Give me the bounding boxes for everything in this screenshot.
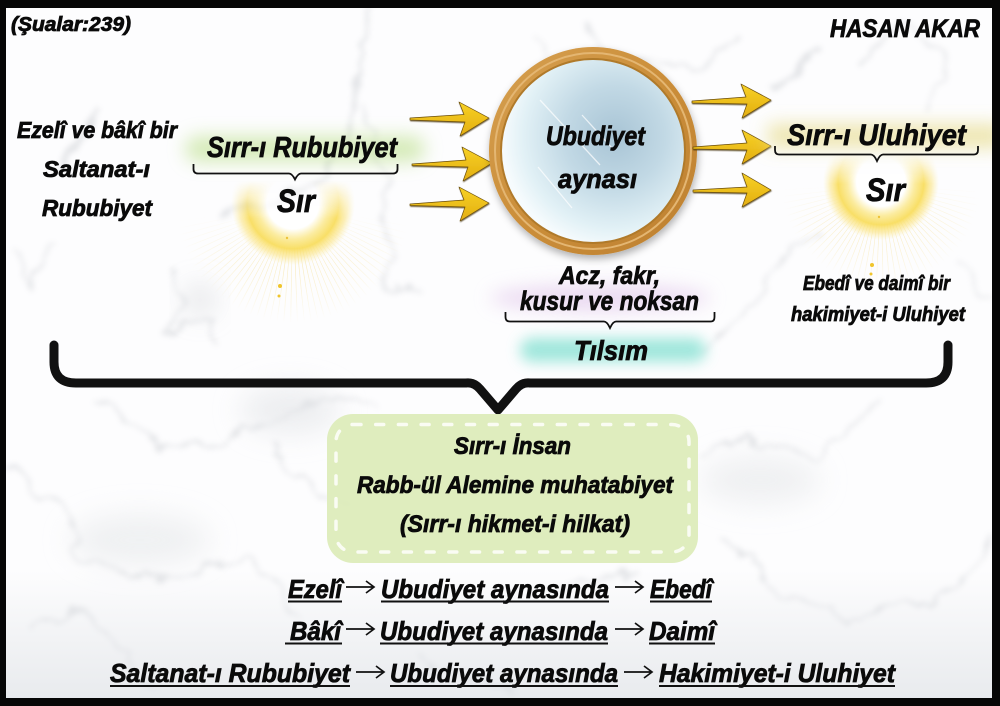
big brace	[54, 345, 948, 410]
brace	[194, 164, 398, 180]
author name: HASAN AKAR	[830, 15, 980, 43]
conclusion line 3: Saltanat-ı Rububiyet	[110, 658, 351, 688]
box text: Sırr-ı İnsan	[454, 433, 571, 460]
purple highlight	[490, 284, 710, 312]
right description: hakimiyet-i Uluhiyet	[791, 304, 966, 326]
left description	[17, 117, 178, 221]
light glow	[811, 115, 951, 276]
conclusion line 2: Bâkî	[290, 616, 344, 646]
stitched border	[336, 424, 689, 552]
conclusion line 1	[288, 574, 714, 604]
right description	[791, 273, 966, 326]
left description: Ezelî ve bâkî bir	[17, 117, 178, 143]
panel: Sırr-ı Rububiyet	[185, 125, 425, 298]
conclusion line 2	[285, 616, 718, 646]
left description: Rububiyet	[42, 195, 153, 221]
box	[327, 414, 698, 563]
heading: Sırr-ı Rububiyet	[207, 132, 398, 164]
brace	[506, 312, 714, 328]
label: Sır: Sır	[277, 183, 316, 219]
left description: Saltanat-ı	[43, 156, 150, 182]
conclusion line 3	[110, 658, 896, 688]
panel: Tılsım	[490, 262, 714, 366]
heading: Sırr-ı Uluhiyet	[787, 119, 968, 152]
label: Tılsım: Tılsım	[574, 335, 648, 366]
panel: Tılsım: kusur ve noksan	[520, 286, 699, 316]
output arrows	[692, 84, 771, 207]
conclusion line 3: Ubudiyet aynasında	[390, 658, 618, 688]
label: Acz, fakr,	[558, 262, 660, 290]
mirror: aynası	[558, 164, 637, 194]
panel: Sırr-ı İnsan: Rabb-ül Alemine muhatabiyet	[357, 472, 674, 499]
mirror label: Ubudiyet	[546, 121, 646, 151]
conclusion line 3: Hakimiyet-i Uluhiyet	[659, 658, 896, 688]
mirror frame	[489, 47, 697, 255]
teal highlight	[520, 338, 706, 362]
right description: Ebedî ve daimî bir	[803, 273, 951, 295]
brace	[775, 146, 978, 161]
label: Sır: Sır	[866, 172, 906, 208]
source reference: (Şualar:239)	[11, 14, 131, 36]
conclusion line 2: Ubudiyet aynasında	[380, 616, 608, 646]
conclusion line 1: Ezelî	[288, 574, 345, 604]
conclusion line 1: Ubudiyet aynasında	[381, 574, 609, 604]
green highlight	[185, 136, 425, 162]
panel: Sırr-ı İnsan	[327, 414, 698, 563]
mirror	[489, 47, 697, 255]
mirror glass	[502, 60, 684, 242]
input arrows	[410, 102, 492, 221]
conclusion line 2: Daimî	[649, 616, 718, 646]
conclusion line 1: Ebedî	[650, 574, 714, 604]
light glow	[213, 125, 373, 298]
yellow highlight	[768, 124, 1000, 148]
panel: Sırr-ı İnsan: (Sırr-ı hikmet-i hilkat)	[400, 511, 630, 538]
panel: Sırr-ı Uluhiyet	[768, 115, 1000, 326]
